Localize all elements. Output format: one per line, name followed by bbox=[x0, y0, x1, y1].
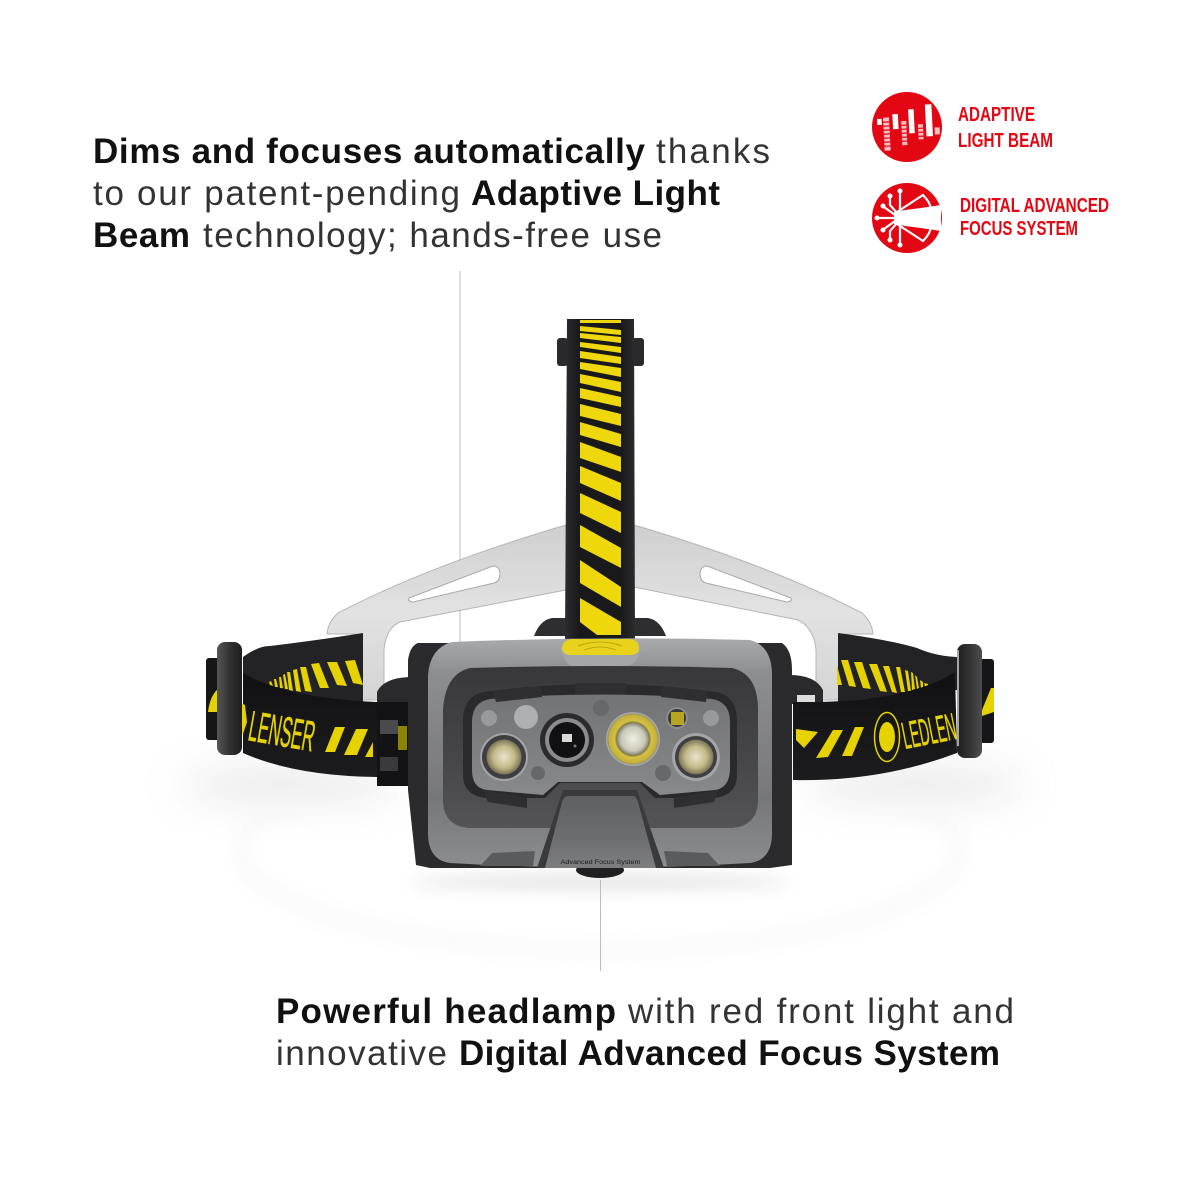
silver head bracket bbox=[327, 525, 873, 700]
yellow top button bbox=[560, 639, 641, 666]
label: adaptive light beam bbox=[958, 104, 1053, 152]
lower shell darker strips bbox=[480, 851, 720, 866]
right headband: LEDLEN bbox=[899, 706, 960, 758]
left housing connector bbox=[377, 677, 413, 786]
heading: adaptive light beam description: Adaptive Light bbox=[471, 174, 720, 213]
logo mark bbox=[874, 712, 900, 762]
floor shadow and reflection bbox=[180, 750, 1025, 950]
text: bottom callout: innovative bbox=[276, 1034, 447, 1073]
icon: digital advanced focus system bbox=[872, 183, 942, 253]
lens panel bbox=[472, 694, 730, 795]
heading: adaptive light beam description: to our patent-pending bbox=[93, 174, 460, 213]
text: bottom callout: Powerful headlamp bbox=[276, 992, 616, 1031]
vertical head strap bbox=[534, 319, 666, 640]
lens frame bbox=[463, 684, 737, 798]
text: bottom callout bbox=[276, 992, 1014, 1073]
centre LED bbox=[606, 712, 660, 766]
left headband bbox=[206, 633, 377, 777]
headlamp body bbox=[408, 638, 792, 878]
text: bottom callout: with red front light and bbox=[627, 992, 1014, 1031]
label: adaptive light beam: LIGHT BEAM bbox=[958, 130, 1053, 152]
label: adaptive light beam: ADAPTIVE bbox=[958, 104, 1035, 126]
focus module: Advanced Focus System bbox=[560, 859, 640, 866]
leader line: bottom callout bbox=[600, 880, 601, 971]
small indicators bbox=[481, 700, 719, 781]
heading: adaptive light beam description: technology; hands-free use bbox=[203, 216, 662, 255]
left LED bbox=[480, 733, 528, 781]
heading: adaptive light beam description: Beam bbox=[93, 216, 190, 255]
side casing bbox=[408, 643, 792, 868]
heading: adaptive light beam description bbox=[93, 132, 770, 255]
label: digital advanced focus system: DIGITAL ADVANCED bbox=[960, 195, 1109, 217]
label: digital advanced focus system: FOCUS SYSTEM bbox=[960, 218, 1078, 240]
icon: adaptive light beam bbox=[872, 92, 942, 162]
strips bbox=[483, 683, 718, 808]
focus module bbox=[537, 790, 664, 878]
text: bottom callout: Digital Advanced Focus System bbox=[459, 1034, 1000, 1073]
front shell bbox=[428, 638, 772, 868]
leader line: top callout bbox=[460, 271, 461, 643]
right LED bbox=[672, 733, 720, 781]
camera sensor bbox=[540, 713, 594, 767]
label: digital advanced focus system bbox=[960, 195, 1109, 240]
recess bbox=[443, 666, 758, 828]
left headband: LENSER bbox=[245, 703, 319, 761]
right headband bbox=[790, 633, 994, 780]
heading: adaptive light beam description: thanks bbox=[656, 132, 770, 171]
red light indicator bbox=[666, 707, 688, 729]
heading: adaptive light beam description: Dims and focuses automatically bbox=[93, 132, 646, 171]
right connector bbox=[790, 675, 823, 704]
